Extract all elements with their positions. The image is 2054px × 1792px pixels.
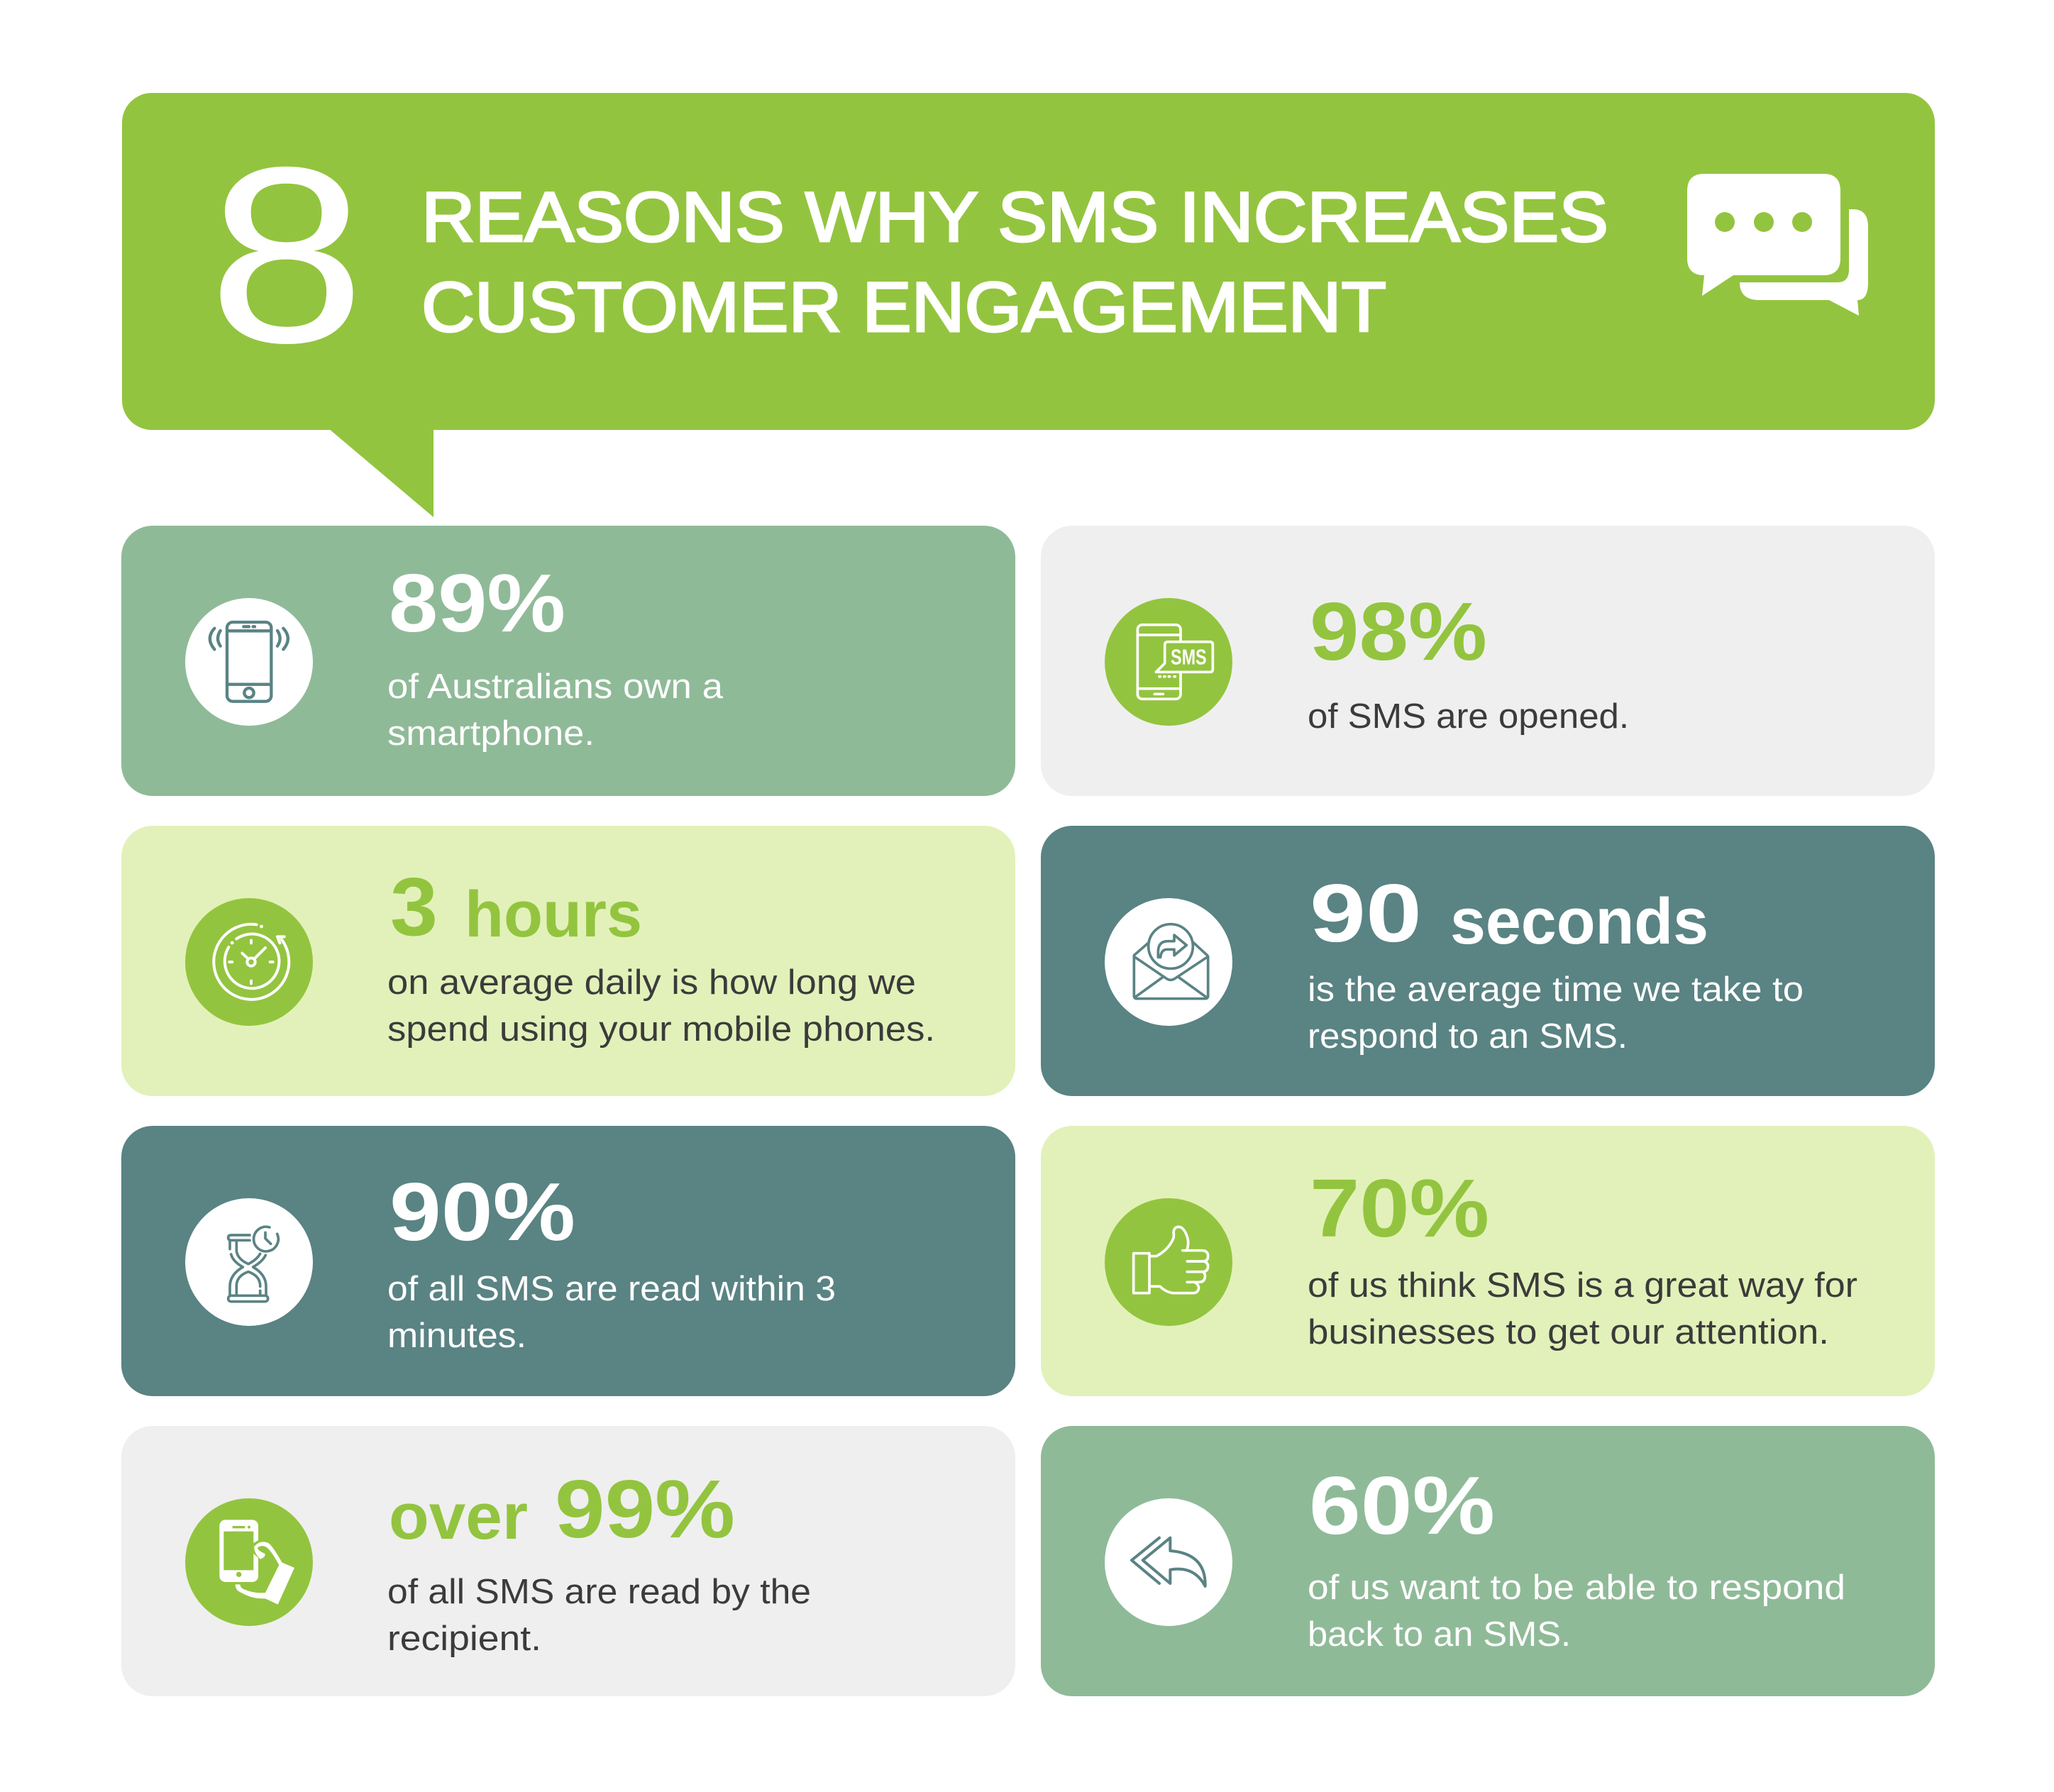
description <box>387 1270 836 1355</box>
description: of SMS are opened. <box>1308 697 1629 736</box>
description <box>387 1573 811 1658</box>
stat: 90 seconds <box>1310 867 1708 959</box>
header banner <box>122 93 1935 517</box>
stat: 70%: 70% <box>1310 1162 1489 1254</box>
icon: envelope with forward arrow <box>1134 924 1208 999</box>
description <box>1308 1266 1857 1351</box>
description: spend using your mobile phones. <box>387 1010 935 1049</box>
stat: 90%: 90% <box>390 1166 575 1258</box>
description: minutes. <box>387 1317 526 1355</box>
description: businesses to get our attention. <box>1308 1313 1829 1351</box>
icon: phone with SMS bubble: SMS <box>1171 646 1207 670</box>
panel: 60% want to respond <box>1041 1426 1935 1696</box>
description <box>1308 970 1804 1056</box>
description: of us want to be able to respond <box>1308 1569 1845 1607</box>
big number 8: 8 <box>209 115 365 394</box>
panel: over 99% read <box>121 1426 1015 1696</box>
icon: hourglass with clock <box>228 1227 278 1302</box>
stat: 3 hours: hours <box>465 878 642 951</box>
title: CUSTOMER ENGAGEMENT <box>421 267 1386 346</box>
description: recipient. <box>387 1620 541 1658</box>
icon: hand holding phone <box>219 1520 294 1605</box>
stat: 90 seconds: seconds <box>1450 885 1708 958</box>
stat: over 99%: 99% <box>555 1463 735 1555</box>
panel: 70% great way <box>1041 1126 1935 1396</box>
stat: 3 hours <box>390 861 642 953</box>
stat: 89%: 89% <box>389 557 565 649</box>
title <box>421 177 1608 346</box>
description: of us think SMS is a great way for <box>1308 1266 1857 1305</box>
icon: vibrating smartphone <box>210 622 288 702</box>
stat: over 99%: over <box>389 1481 528 1553</box>
icon: thumbs up <box>1134 1227 1208 1293</box>
panel: 98% opened <box>1041 526 1935 796</box>
panel: 89% own a smartphone <box>121 526 1015 796</box>
description: on average daily is how long we <box>387 963 916 1002</box>
description: back to an SMS. <box>1308 1615 1571 1654</box>
panel: 90% read within 3 minutes <box>121 1126 1015 1396</box>
stat: over 99% <box>389 1463 735 1555</box>
description: is the average time we take to <box>1308 970 1804 1009</box>
icon: clock with arrow <box>214 924 289 1000</box>
description <box>387 668 724 753</box>
panel: 3 hours daily <box>121 826 1015 1096</box>
title: REASONS WHY SMS INCREASES <box>421 177 1608 256</box>
icon: chat bubbles <box>1687 174 1868 316</box>
description: of all SMS are read by the <box>387 1573 811 1611</box>
stat: 60%: 60% <box>1309 1459 1495 1552</box>
panel: 90 seconds <box>1041 826 1935 1096</box>
description: of all SMS are read within 3 <box>387 1270 836 1308</box>
description <box>387 963 935 1049</box>
icon: reply arrow <box>1132 1538 1205 1586</box>
description: of Australians own a <box>387 668 724 706</box>
description <box>1308 1569 1845 1654</box>
stat: 3 hours: 3 <box>390 861 438 953</box>
description: smartphone. <box>387 714 595 753</box>
stat: 98%: 98% <box>1310 585 1487 677</box>
stat: 90 seconds: 90 <box>1310 867 1422 959</box>
icon: phone with SMS bubble <box>1137 625 1213 699</box>
description: respond to an SMS. <box>1308 1017 1628 1056</box>
